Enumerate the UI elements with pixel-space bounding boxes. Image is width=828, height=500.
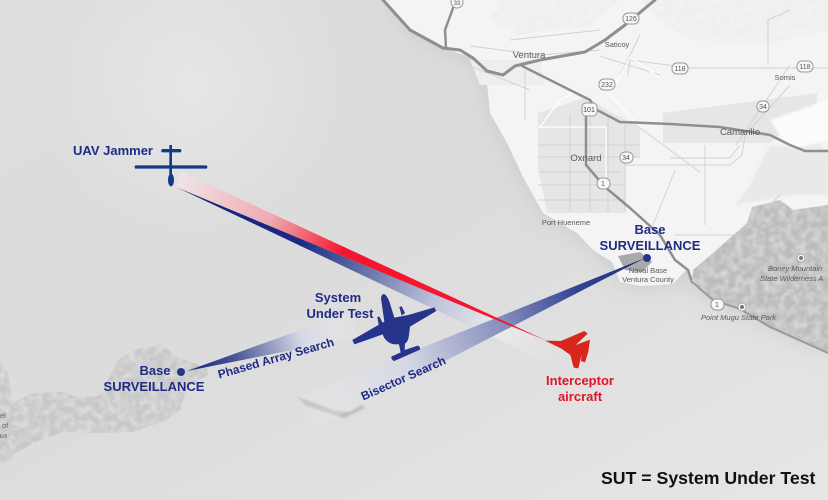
highway shields: 1 [715, 302, 719, 309]
label: System Under Test: System [315, 290, 361, 305]
place names: Naval Base [629, 266, 667, 275]
highways [383, 0, 828, 282]
highway shields: 1 [601, 181, 605, 188]
place names: State Wilderness A [760, 274, 823, 283]
beam: bisector search [297, 258, 645, 428]
place names [513, 40, 823, 322]
beam: jammer to interceptor blue [176, 187, 567, 372]
label: UAV Jammer: UAV Jammer [73, 143, 153, 158]
highway shields: 33 [454, 1, 461, 7]
place names: Ventura [513, 50, 546, 61]
beam: phased array search [187, 312, 358, 371]
label: Base Surveillance left: SURVEILLANCE [104, 379, 205, 394]
label: Base Surveillance left: Base [139, 363, 171, 378]
label: Interceptor aircraft: aircraft [558, 389, 603, 404]
label: Bisector Search: Bisector Search [359, 353, 448, 403]
highway shields: 232 [601, 82, 613, 89]
label: Phased Array Search: Phased Array Search [216, 335, 336, 381]
place names: Oxnard [570, 153, 602, 164]
left island: of [2, 421, 9, 430]
place names: Somis [775, 73, 796, 82]
place names: Port Hueneme [542, 218, 590, 227]
label: Base Surveillance right: Base [634, 222, 666, 237]
highway shields: 101 [583, 107, 595, 114]
place names: Saticoy [605, 40, 630, 49]
highway shields: 34 [622, 155, 630, 162]
minor roads [460, 10, 828, 235]
beam: jammer to interceptor red [176, 171, 547, 341]
base dot left [177, 368, 185, 376]
icon: interceptor aircraft [545, 331, 590, 368]
highway shields: 118 [674, 66, 686, 73]
icon: UAV jammer [135, 145, 207, 186]
place names: Camarillo [720, 127, 760, 138]
label: Base Surveillance right: SURVEILLANCE [600, 238, 701, 253]
mountains [692, 200, 828, 353]
icon: system under test aircraft [352, 294, 436, 361]
base dot right [643, 254, 651, 262]
highway shields: 34 [759, 104, 767, 111]
note: SUT definition: SUT = System Under Test [601, 468, 816, 488]
place names: Point Mugu State Park [701, 313, 777, 322]
highway shields [451, 0, 813, 311]
urban areas [470, 60, 828, 272]
left island [0, 345, 208, 463]
label: System Under Test: Under Test [307, 306, 374, 321]
mainland map [383, 0, 828, 353]
place names: Ventura County [622, 275, 674, 284]
place names: Boney Mountain [768, 264, 822, 273]
left island: el [0, 411, 6, 420]
small island [297, 397, 365, 418]
highway shields: 118 [799, 64, 811, 71]
label: Interceptor aircraft: Interceptor [546, 373, 614, 388]
highway shields: 126 [625, 16, 637, 23]
hills [640, 0, 828, 45]
